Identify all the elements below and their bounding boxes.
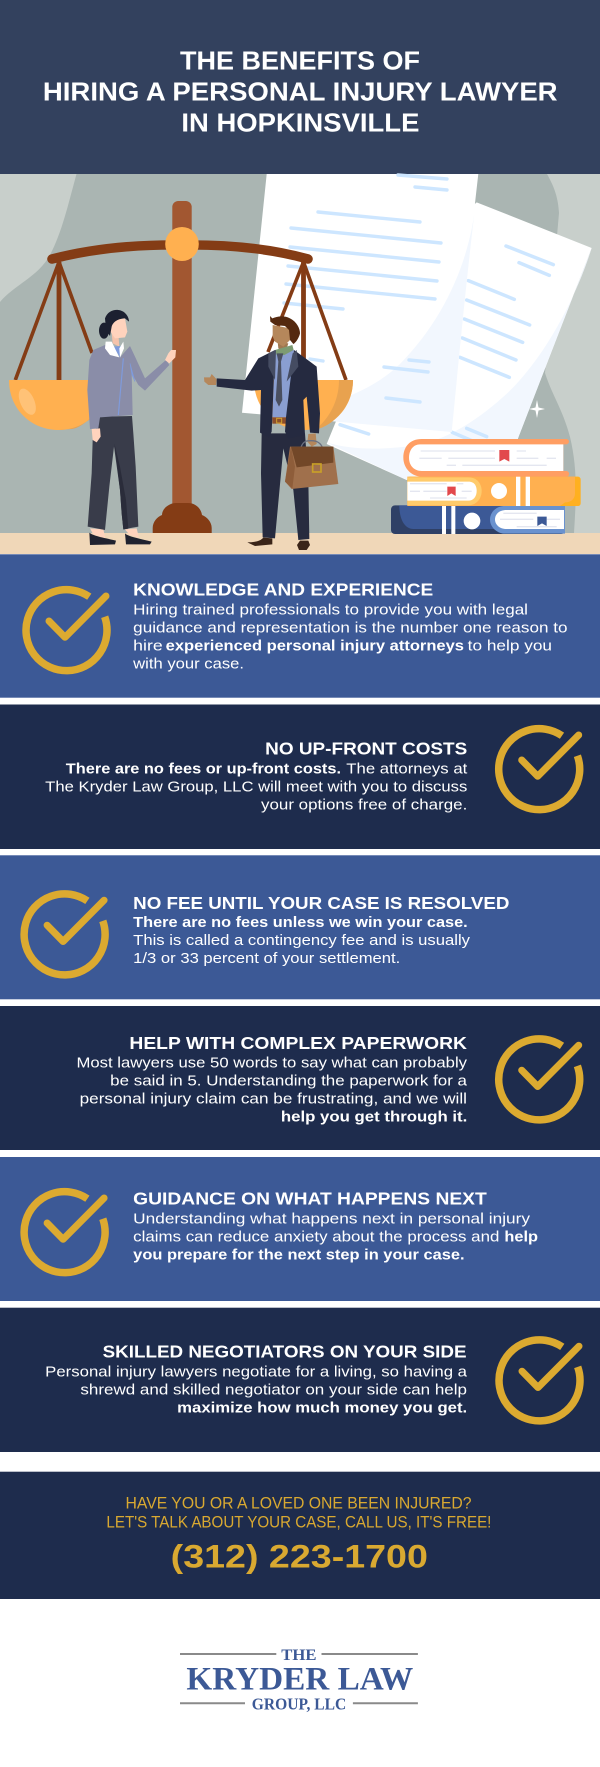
right pan xyxy=(254,380,353,430)
text block: KNOWLEDGE AND EXPERIENCE xyxy=(133,580,433,600)
document: back page xyxy=(327,202,592,480)
text block: NO FEE UNTIL YOUR CASE IS RESOLVED xyxy=(133,893,509,913)
text block: The Kryder Law Group, LLC will meet with you to discuss xyxy=(45,778,467,795)
icon: check circle xyxy=(499,729,580,810)
top book xyxy=(403,439,569,477)
panel: skilled negotiators xyxy=(0,1308,600,1452)
text block: maximize how much money you get. xyxy=(177,1399,467,1416)
text block: 1/3 or 33 percent of your settlement. xyxy=(133,950,400,967)
text block: help you get through it. xyxy=(281,1108,467,1125)
text block: Personal injury lawyers negotiate for a living, so having a xyxy=(45,1363,468,1380)
logo: The Kryder Law Group, LLC: KRYDER LAW xyxy=(186,1661,413,1697)
text block: SKILLED NEGOTIATORS ON YOUR SIDE xyxy=(103,1342,466,1362)
text block: Most lawyers use 50 words to say what can probably xyxy=(76,1054,468,1071)
icon: check circle xyxy=(26,590,107,671)
text block: claims can reduce anxiety about the process and xyxy=(133,1228,499,1245)
text block: HELP WITH COMPLEX PAPERWORK xyxy=(129,1033,468,1053)
title xyxy=(43,47,558,138)
icon: check circle xyxy=(499,1039,580,1120)
scale strings xyxy=(15,262,346,380)
title: IN HOPKINSVILLE xyxy=(181,110,419,138)
middle book xyxy=(407,477,581,506)
text block: shrewd and skilled negotiator on your side can help xyxy=(80,1381,467,1398)
text block: This is called a contingency fee and is usually xyxy=(133,932,471,949)
text block: help xyxy=(504,1228,538,1245)
title: HIRING A PERSONAL INJURY LAWYER xyxy=(43,79,558,107)
phone number: (312) 223-1700 xyxy=(171,1538,428,1574)
text block: to help you xyxy=(468,637,552,654)
icon: check circle xyxy=(24,1192,105,1273)
ground xyxy=(0,533,600,554)
text block: Hiring trained professionals to provide you with legal xyxy=(133,601,528,618)
text block: you prepare for the next step in your case. xyxy=(133,1246,465,1263)
logo: The Kryder Law Group, LLC: GROUP, LLC xyxy=(252,1694,346,1713)
text block: The attorneys at xyxy=(346,760,468,777)
scale hub xyxy=(165,227,199,261)
panel: call to action xyxy=(0,1472,600,1599)
scale xyxy=(9,201,353,533)
text block: experienced personal injury attorneys xyxy=(166,637,464,654)
logo: The Kryder Law Group, LLC: THE xyxy=(281,1645,317,1664)
panel: complex paperwork xyxy=(0,1006,600,1150)
logo: The Kryder Law Group, LLC xyxy=(180,1645,418,1713)
scale post xyxy=(172,201,192,510)
text block xyxy=(76,1033,468,1125)
text block: There are no fees or up-front costs. xyxy=(66,760,341,777)
figure: woman xyxy=(87,310,176,545)
text block: Understanding what happens next in personal injury xyxy=(133,1210,531,1227)
books stack xyxy=(391,439,581,534)
document: front page xyxy=(242,174,478,432)
panel: no up-front costs xyxy=(0,704,600,849)
text block: NO UP-FRONT COSTS xyxy=(265,739,467,759)
text block xyxy=(45,1342,468,1416)
header panel xyxy=(0,0,600,174)
panel: guidance on what happens next xyxy=(0,1157,600,1301)
illustration: lawyers, scale, documents and books xyxy=(0,174,600,554)
callout text: LET'S TALK ABOUT YOUR CASE, CALL US, IT'S FREE! xyxy=(106,1513,491,1531)
text block: There are no fees unless we win your case. xyxy=(133,914,468,931)
callout text: HAVE YOU OR A LOVED ONE BEEN INJURED? xyxy=(126,1494,472,1512)
panel: no fee until resolved xyxy=(0,855,600,999)
left pan xyxy=(9,380,108,430)
icon: check circle xyxy=(24,894,105,975)
text block: with your case. xyxy=(132,655,244,672)
sparkle xyxy=(529,400,545,418)
text block xyxy=(133,893,509,967)
text block xyxy=(132,580,567,672)
callout text xyxy=(106,1494,491,1531)
bottom book xyxy=(391,505,565,534)
title: THE BENEFITS OF xyxy=(180,47,420,75)
icon: check circle xyxy=(499,1340,580,1421)
scale beam xyxy=(52,245,308,259)
text block: GUIDANCE ON WHAT HAPPENS NEXT xyxy=(133,1189,487,1209)
figure: man with briefcase xyxy=(204,316,338,550)
panel: knowledge and experience xyxy=(0,554,600,698)
text block: your options free of charge. xyxy=(261,796,467,813)
text block xyxy=(45,739,468,813)
text block: personal injury claim can be frustrating, and we will xyxy=(80,1090,467,1107)
text block xyxy=(133,1189,538,1263)
scale base xyxy=(153,503,212,533)
text block: be said in 5. Understanding the paperwork for a xyxy=(110,1072,468,1089)
text block: guidance and representation is the number one reason to xyxy=(133,619,567,636)
background blob xyxy=(0,174,576,533)
text block: hire xyxy=(133,637,163,654)
